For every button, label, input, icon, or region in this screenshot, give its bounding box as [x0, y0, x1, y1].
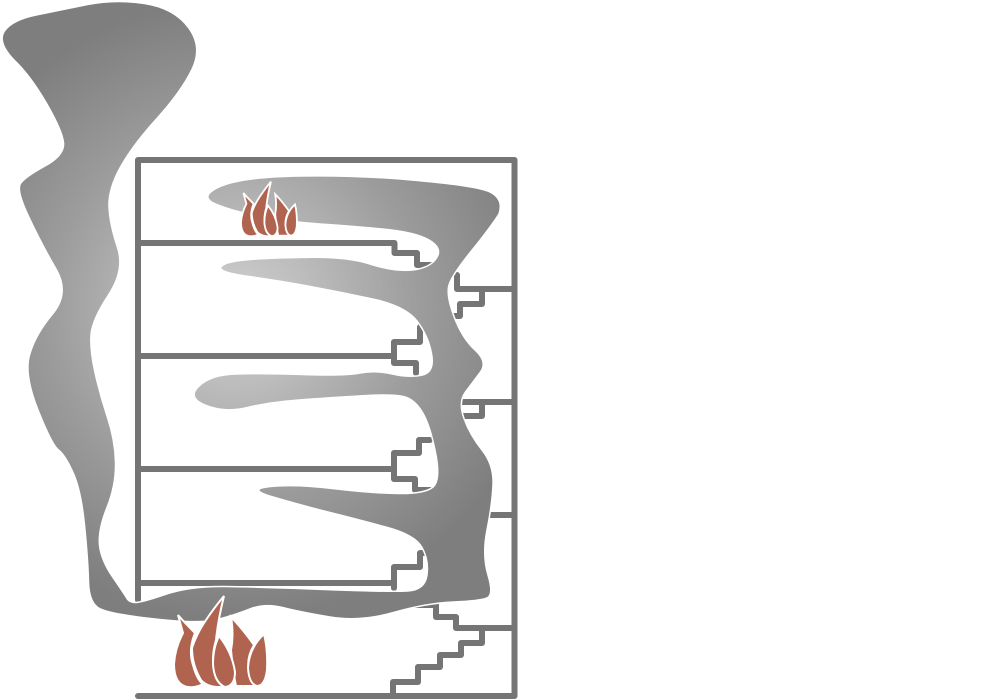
icon: small fire on top floor [241, 182, 297, 236]
smoke plume [2, 1, 500, 622]
icon: large fire at ground level [174, 596, 267, 687]
building structure: walls, floors and stairs [138, 160, 514, 696]
